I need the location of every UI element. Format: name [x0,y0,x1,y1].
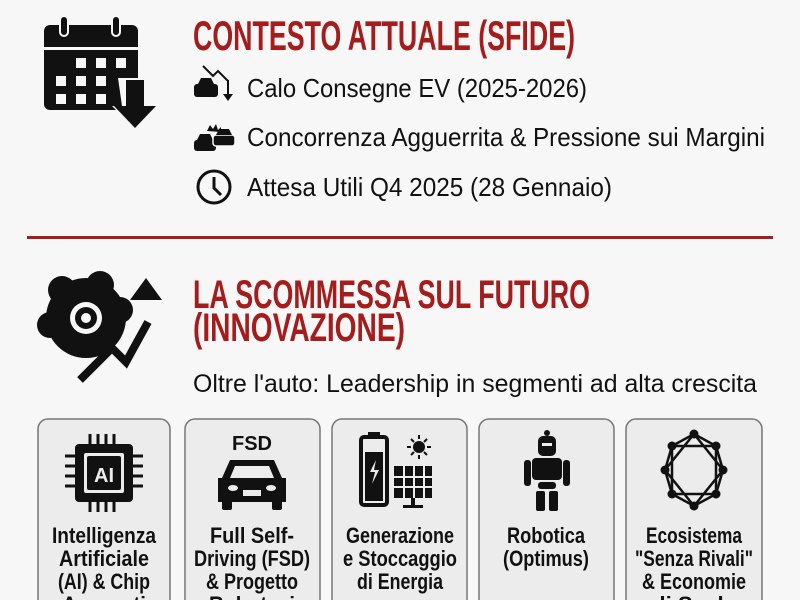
card: FSD: Full Self- [210,523,294,548]
heading: la scommessa sul futuro: LA SCOMMESSA SUL FUTURO [193,273,590,317]
card: robotica: (Optimus) [503,546,589,571]
item: calo consegne: Calo Consegne EV (2025-2026) [247,73,587,103]
card: ecosistema: "Senza Rivali" [635,546,753,571]
icon: robot [524,430,570,511]
icon: calendar with down arrow [44,16,160,130]
icon: network [665,434,723,506]
card: AI: Artificiale [59,546,149,571]
card: FSD: & Progetto [206,569,298,594]
icon: car FSD [218,433,286,510]
card: energia: e Stoccaggio [343,546,457,571]
item: attesa utili: Attesa Utili Q4 2025 (28 Gennaio) [247,172,612,202]
subtitle: Oltre l'auto: Leadership in segmenti ad alta crescita [193,370,757,398]
card: robotica [479,419,614,600]
heading: la scommessa sul futuro: (INNOVAZIONE) [193,306,405,350]
icon: brain gear with growth arrow [37,271,162,380]
icon: cars collision [194,124,235,151]
card: AI [38,419,170,600]
card: FSD: Driving (FSD) [194,546,310,571]
item: calo consegne [194,66,587,103]
card: energia: Generazione [346,523,454,548]
icon: car FSD: FSD [232,433,272,455]
title: contesto attuale: CONTESTO ATTUALE (SFIDE) [193,12,575,59]
card: robotica: Robotica [507,523,586,548]
heading: la scommessa sul futuro [193,273,590,350]
icon: AI chip [65,434,143,512]
card: FSD [185,419,320,600]
card: AI: (AI) & Chip [58,569,150,594]
card: AI: Intelligenza [52,523,157,548]
item: concorrenza: Concorrenza Agguerrita & Pressione sui Margini [247,122,765,152]
icon: car down trend [194,66,233,101]
icon: battery and solar [361,432,432,508]
card: ecosistema: & Economie [642,569,746,594]
card: ecosistema: Ecosistema [646,523,743,548]
icon: AI chip: AI [94,465,114,487]
card: energia: di Energia [357,569,444,594]
card: energia [332,419,467,600]
card: ecosistema [626,419,762,600]
icon: clock [198,171,230,203]
